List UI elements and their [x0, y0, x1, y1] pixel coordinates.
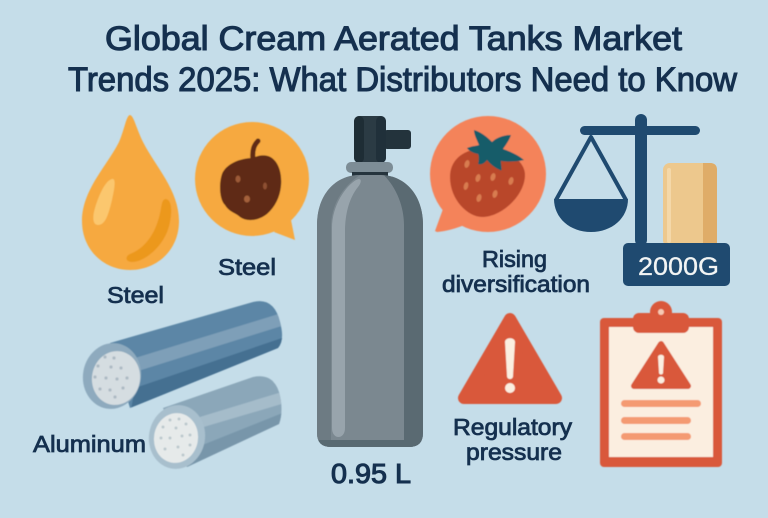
clipboard warning triangle: [634, 344, 688, 386]
label: aluminum: Aluminum: [33, 431, 146, 457]
icon: coral speech bubble with strawberry: [430, 116, 546, 232]
icon: balance scale with block: [554, 114, 730, 286]
clipboard clip: [633, 301, 689, 333]
scale base with weight: [623, 243, 730, 286]
clipboard text lines: [621, 400, 701, 440]
cylinder valve: [354, 116, 386, 163]
scale block: [663, 163, 717, 247]
title: Trends 2025: What Distributors Need to Know: [68, 61, 737, 99]
label: steel under drop: Steel: [107, 282, 164, 308]
cylinder side handle: [384, 130, 411, 149]
scale beam and post: [580, 114, 700, 246]
icon: clipboard with warning: [600, 301, 722, 467]
icon: large blue pipe: [78, 301, 285, 415]
scale pan: [554, 137, 628, 232]
icon: gas cylinder: [317, 116, 425, 450]
label: steel under bubble: Steel: [218, 254, 276, 280]
label: rising diversification: diversification: [442, 271, 590, 297]
label: volume: 0.95 L: [331, 458, 411, 489]
label: regulatory pressure: pressure: [466, 439, 562, 465]
label: rising diversification: Rising: [482, 246, 547, 272]
scale base with weight: 2000G: [638, 253, 719, 281]
title: [68, 20, 737, 99]
label: regulatory pressure: Regulatory: [453, 414, 573, 440]
icon: orange drop: [82, 115, 179, 270]
icon: orange speech bubble with brown fruit: [195, 122, 309, 240]
label: regulatory pressure: [453, 414, 573, 465]
icon: warning triangle: [464, 319, 556, 398]
label: rising diversification: [442, 246, 590, 297]
cylinder collar: [346, 162, 393, 173]
icon: small grey-blue pipe: [144, 376, 285, 473]
title: Global Cream Aerated Tanks Market: [105, 20, 683, 58]
cylinder body: [317, 170, 425, 450]
